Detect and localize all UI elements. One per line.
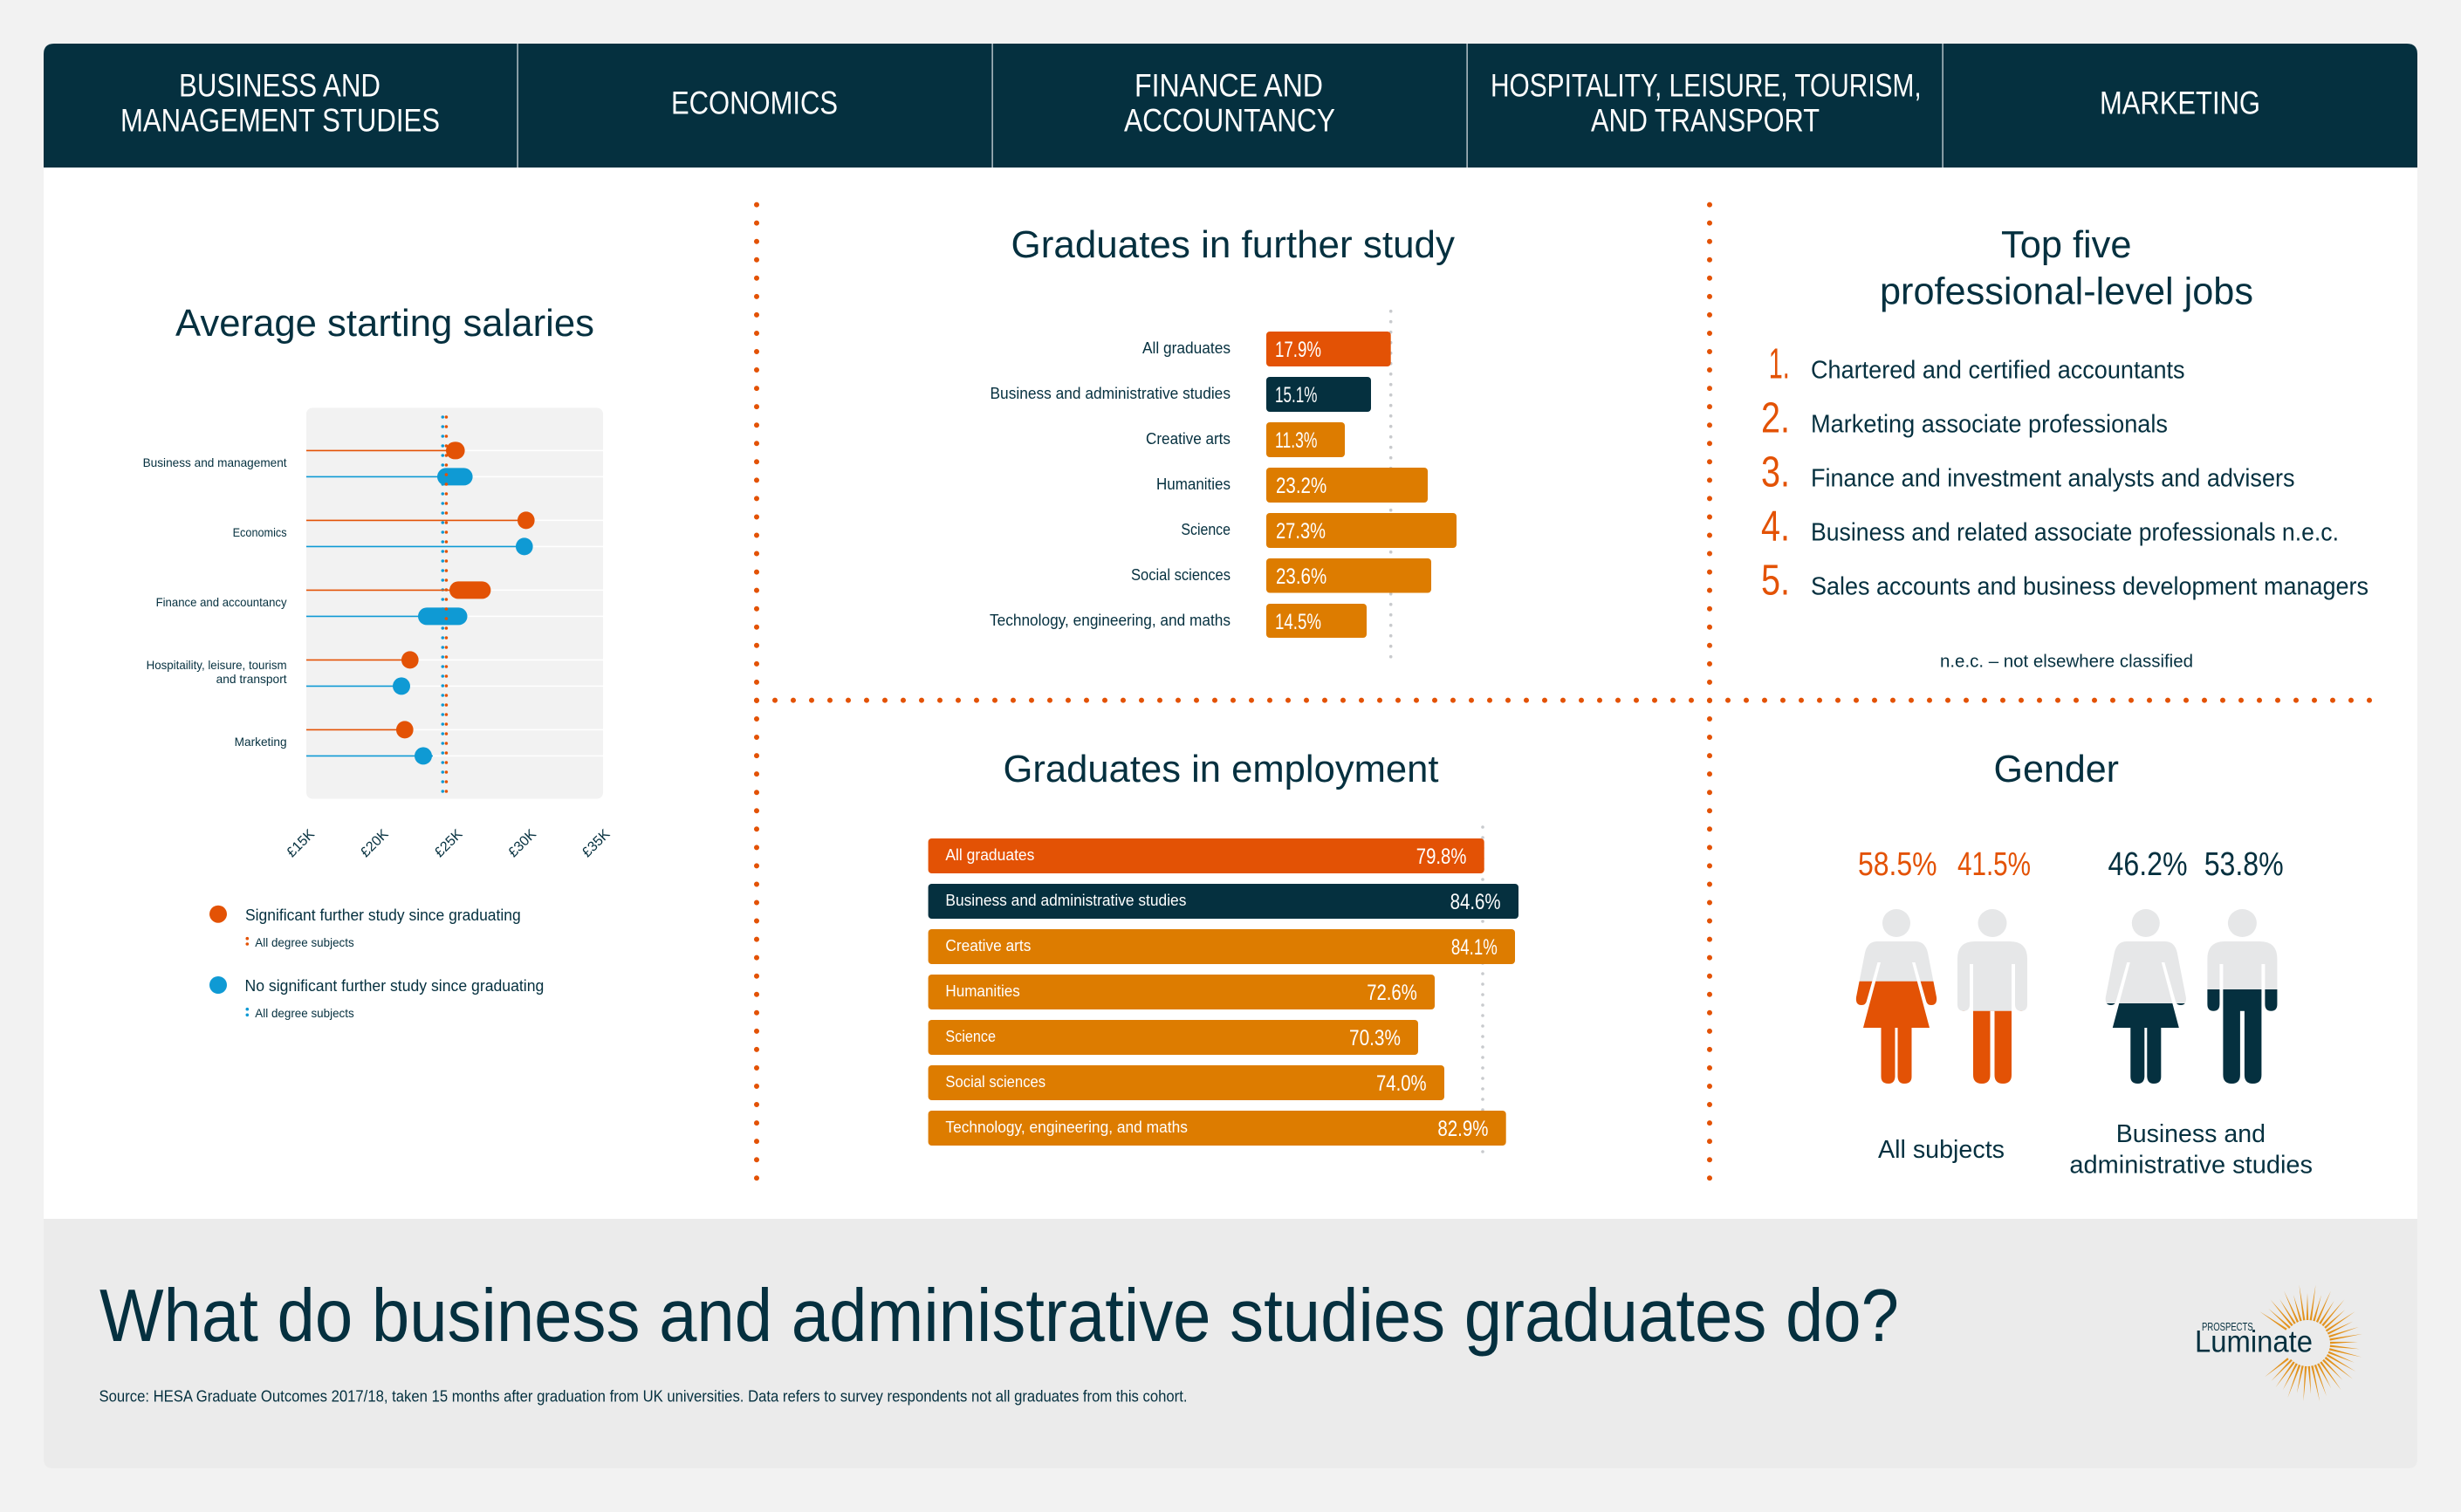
bar chart: employment: Humanities [945,982,1020,1000]
chart: salary dumbbell plot [143,408,614,860]
logo: Prospects Luminate [2195,1284,2362,1402]
bar chart: employment: Technology, engineering, and maths [945,1119,1188,1136]
header bar with subject names [44,44,2417,168]
bar chart: further study: Social sciences [1131,566,1230,584]
header bar with subject names: MANAGEMENT STUDIES [120,103,440,139]
header: business and management studies: BUSINESS AND [179,68,380,104]
heading: gender: Gender [1993,748,2119,790]
bar chart: employment: 74.0% [1376,1071,1427,1096]
ranked job list: Sales accounts and business development managers [1811,572,2368,600]
caption: all subjects: All subjects [1878,1136,2005,1164]
footer band [44,1219,2417,1468]
bar chart: employment: 84.1% [1451,935,1498,960]
main title: What do business and administrative studies graduates do? [99,1275,1899,1358]
bar chart: further study: 23.2% [1276,474,1326,498]
percentages: 41.5% [1957,846,2031,883]
icon: man, all subjects [1957,909,2027,1084]
axis labels: £30K [506,826,539,860]
header bar with subject names: HOSPITALITY, LEISURE, TOURISM, [1491,68,1922,104]
axis labels: £35K [579,826,614,860]
bar chart: further study: 11.3% [1275,428,1317,453]
ranked job list [1761,340,2368,604]
percentages [1858,846,2284,883]
icon: man, business and administrative studies [2207,909,2277,1084]
bar chart: employment: All graduates [945,846,1034,864]
header bar with subject names: FINANCE AND [1135,68,1323,104]
percentages: 53.8% [2204,846,2284,883]
panel: average starting salaries [143,302,614,1020]
caption: business and administrative studies: administrative studies [2069,1152,2313,1180]
bar chart: further study: 27.3% [1276,519,1326,544]
ranked job list: 3. [1761,448,1790,496]
axis labels: £25K [432,826,466,860]
bar chart: further study: Technology, engineering, and maths [990,612,1230,629]
heading: top five: Top five [2001,223,2131,266]
heading: graduates in further study: Graduates in further study [1011,223,1455,266]
heading: graduates in employment: Graduates in employment [1004,748,1438,790]
legend: No significant further study since graduating [244,976,544,995]
percentages: 58.5% [1858,846,1937,883]
bar chart: further study: Humanities [1156,475,1230,493]
legend [209,906,544,1020]
header bar with subject names: ECONOMICS [671,86,838,121]
ranked job list: Finance and investment analysts and advisers [1811,464,2295,492]
header bar with subject names: ACCOUNTANCY [1124,103,1335,139]
heading: average starting salaries: Average starting salaries [175,302,594,345]
panel: gender [1856,748,2313,1180]
icon: woman, all subjects [1856,909,1937,1084]
row labels: Finance and accountancy [156,595,287,609]
ranked job list: 4. [1761,503,1790,551]
heading: top five [1880,223,2253,312]
ranked job list: 2. [1761,394,1790,441]
axis labels: £20K [358,826,392,860]
source note: Source: HESA Graduate Outcomes 2017/18, taken 15 months after graduation from UK universities. Data refers to survey respondents not all graduates from this cohort. [99,1387,1187,1405]
bar chart: employment: 84.6% [1450,890,1501,914]
logo: Prospects Luminate: Luminate [2195,1324,2313,1358]
row labels [143,455,287,749]
row labels: and transport [216,672,287,686]
bar chart: employment [929,827,1518,1153]
bar chart: further study: Creative arts [1146,430,1230,448]
ranked job list: Business and related associate professionals n.e.c. [1811,519,2339,547]
bar chart: further study: All graduates [1142,339,1230,357]
header bar with subject names: MARKETING [2100,86,2260,121]
legend: All degree subjects [255,935,354,949]
bar chart: further study [990,311,1457,657]
bar chart: further study: 14.5% [1275,610,1321,634]
header bar with subject names: AND TRANSPORT [1591,103,1820,139]
ranked job list: 1. [1769,340,1790,387]
footnote: n.e.c.: n.e.c. – not elsewhere classified [1940,653,2193,672]
bar chart: employment: Business and administrative studies [945,892,1186,909]
bar chart: further study: 15.1% [1275,383,1317,407]
main white panel [44,157,2417,1230]
axis labels: £15K [284,826,318,860]
icon: woman, business and administrative studies [2106,909,2186,1084]
bar chart: further study: Science [1181,521,1230,538]
row labels: Marketing [235,735,287,749]
ranked job list: 5. [1761,557,1790,604]
row labels: Economics [233,525,287,539]
bar chart: employment: 82.9% [1437,1117,1488,1141]
legend: Significant further study since graduating [245,906,521,924]
legend: All degree subjects [255,1006,354,1020]
ranked job list: Chartered and certified accountants [1811,356,2185,384]
caption: business and administrative studies: Business and [2116,1120,2266,1148]
percentages: 46.2% [2108,846,2187,883]
bar chart: employment: Science [945,1028,996,1045]
bar chart: further study: 17.9% [1275,338,1321,362]
bar chart: employment: Creative arts [945,937,1031,954]
logo: Prospects Luminate: PROSPECTS [2202,1320,2253,1333]
bar chart: employment: 72.6% [1367,981,1417,1005]
ranked job list: Marketing associate professionals [1811,410,2168,438]
axis labels [284,826,614,860]
caption: business and administrative studies [2069,1120,2313,1180]
bar chart: further study: 23.6% [1276,564,1326,589]
bar chart: employment: Social sciences [945,1073,1045,1091]
heading: top five: professional-level jobs [1880,270,2253,312]
panel: graduates in employment [929,748,1518,1153]
bar chart: further study: Business and administrative studies [990,385,1230,402]
panel: graduates in further study [990,223,1457,657]
row labels: Business and management [143,455,287,469]
bar chart: employment: 70.3% [1349,1026,1401,1050]
bar chart: employment: 79.8% [1416,845,1466,869]
row labels: Hospitaility, leisure, tourism [147,658,287,672]
panel: top five professional-level jobs [1761,223,2368,672]
